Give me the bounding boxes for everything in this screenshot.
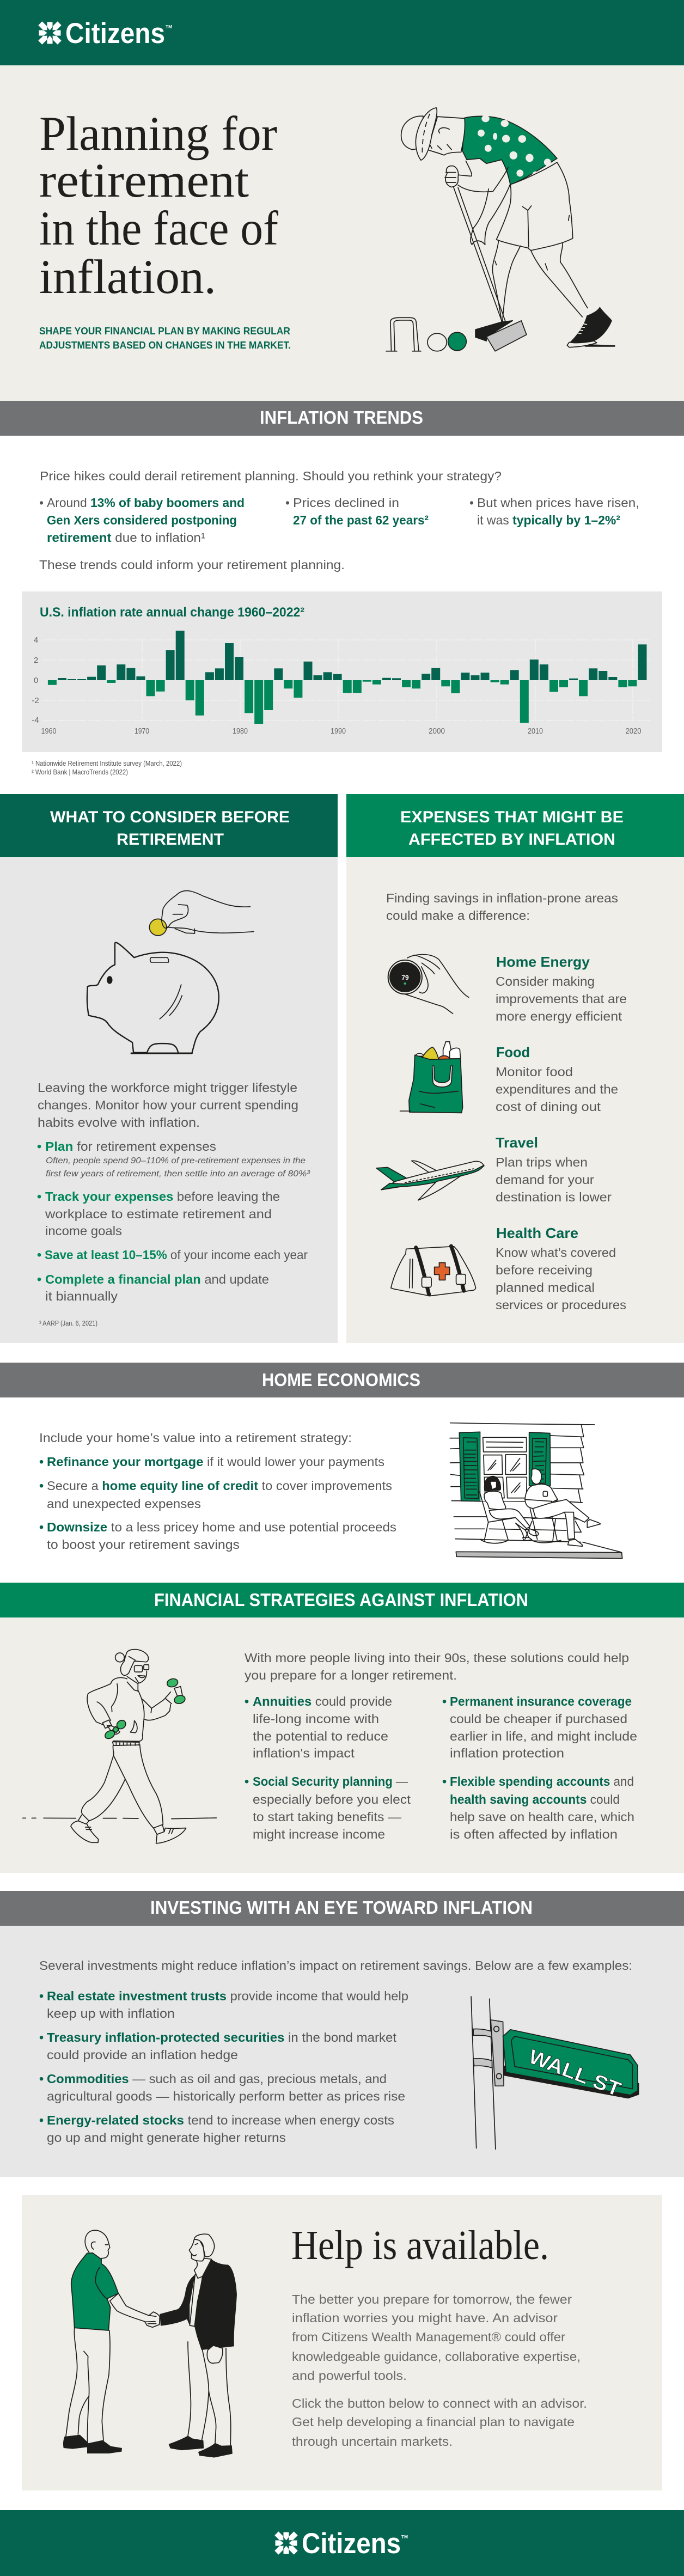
text block: travel (496, 1134, 612, 1204)
icon: grocery bag (400, 1042, 463, 1113)
stat: postponing retirement: Around 13% of baby boomers and (47, 496, 245, 510)
list: retirement actions: • (37, 1139, 41, 1153)
text block: home economics: Refinance your mortgage if it would lower your payments (47, 1455, 384, 1469)
text block: lifestyle changes (38, 1081, 298, 1130)
stat: prices declined (285, 496, 429, 527)
panel: inflation bar chart: 2000 (429, 727, 445, 736)
text block: permanent insurance: inflation protection (450, 1746, 564, 1760)
list: retirement actions: Track your expenses before leaving the (45, 1189, 280, 1204)
list: investment types: could provide an inflation hedge (47, 2048, 238, 2062)
text block: travel: Plan trips when (496, 1155, 588, 1169)
panel: inflation bar chart (22, 591, 662, 752)
list: investment types: agricultural goods — historically perform better as prices rise (47, 2089, 405, 2103)
footer band with logo: TM (401, 2535, 408, 2540)
subtitle: SHAPE YOUR FINANCIAL PLAN BY MAKING REGULAR (39, 326, 290, 337)
list: investment types: Energy-related stocks tend to increase when energy costs (47, 2113, 394, 2127)
list: retirement actions: • (37, 1272, 41, 1286)
text block: social security: might increase income (253, 1827, 385, 1841)
text block: lifestyle changes: changes. Monitor how your current spending (38, 1098, 298, 1112)
list: retirement actions: Often, people spend 90–110% of pre-retirement expenses in the (46, 1156, 306, 1165)
text block: annuities (245, 1694, 392, 1760)
stat: prices declined: Prices declined in (293, 496, 399, 510)
icon: piggy bank with coin (87, 891, 254, 1053)
intro text: inflation trends: These trends could inform your retirement planning. (39, 558, 345, 572)
panel: help is available (22, 2195, 662, 2490)
text block: annuities: inflation's impact (253, 1746, 355, 1760)
text block: food (496, 1044, 618, 1114)
panel: inflation bar chart: -4 (32, 716, 39, 725)
section band: investing (0, 1891, 684, 1926)
text block: home energy (496, 954, 627, 1023)
text block: health care: Health Care (496, 1225, 578, 1241)
icon: airplane (376, 1161, 484, 1200)
text block: permanent insurance: Permanent insurance coverage (450, 1694, 632, 1708)
stat: postponing retirement: • (39, 496, 44, 510)
text block: home economics (39, 1431, 396, 1552)
text block: advisor: knowledgeable guidance, collaborative expertise, (292, 2349, 581, 2364)
icon: Citizens logo mark (274, 2531, 298, 2555)
list: investment types: • (39, 2113, 44, 2127)
heading: AFFECTED BY INFLATION (408, 831, 615, 849)
text: street name: WALL ST (526, 2045, 624, 2101)
text block: home economics: Downsize to a less pricey home and use potential proceeds (47, 1520, 396, 1534)
intro text: inflation trends: Price hikes could derail retirement planning. Should you rethink your strategy? (40, 469, 502, 483)
list: investment types: Real estate investment trusts provide income that would help (47, 1989, 408, 2003)
section band: home economics: HOME ECONOMICS (262, 1370, 420, 1390)
text block: flexible spending: • (442, 1774, 447, 1788)
header band with logo: Citizens (65, 17, 165, 50)
text block: social security: especially before you elect (253, 1792, 411, 1806)
text block: home energy: Consider making (496, 974, 595, 988)
text block: permanent insurance: could be cheaper if purchased (450, 1712, 627, 1726)
list: retirement actions: income goals (45, 1224, 122, 1238)
text block: home economics: and unexpected expenses (47, 1497, 201, 1511)
panel: inflation bar chart: 0 (34, 676, 38, 685)
panel: expenses affected by inflation (346, 794, 684, 1343)
text block: advisor: from Citizens Wealth Management® could offer (292, 2330, 565, 2344)
section band: inflation trends: INFLATION TRENDS (260, 407, 423, 428)
icon: hand on thermostat (388, 955, 469, 1014)
text block: investing intro: Several investments might reduce inflation’s impact on retirement savings. Below are a few examples: (39, 1958, 632, 1973)
footnotes: sources (32, 759, 182, 776)
text block: health care: services or procedures (496, 1298, 626, 1312)
title: inflation. (39, 251, 216, 304)
text block: travel: Travel (496, 1134, 538, 1151)
list: retirement actions: Complete a financial plan and update (45, 1272, 269, 1286)
text block: home energy: more energy efficient (496, 1009, 622, 1023)
text block: savings intro: could make a difference: (386, 908, 530, 923)
text block: strategies intro: you prepare for a longer retirement. (245, 1668, 457, 1682)
text block: home energy: Home Energy (496, 954, 590, 970)
section band: inflation trends (0, 401, 684, 436)
list: investment types: go up and might generate higher returns (47, 2131, 286, 2145)
header band with logo (0, 0, 684, 65)
stat: postponing retirement (39, 496, 245, 545)
label: thermostat temperature: 79 (401, 974, 409, 981)
panel: inflation bar chart: 2 (34, 656, 38, 665)
text block: home economics: • (39, 1520, 44, 1534)
footer band with logo: Citizens (302, 2528, 401, 2560)
footnotes: sources: ¹ Nationwide Retirement Institute survey (March, 2022) (32, 759, 182, 767)
list: retirement actions: first few years of retirement, then settle into an average of 80%³ (46, 1169, 310, 1179)
text block: social security: Social Security planning — (253, 1774, 408, 1788)
heading: help is available: Help is available. (291, 2223, 549, 2268)
title (39, 107, 278, 304)
text block: health care: before receiving (496, 1263, 593, 1277)
list: investment types: • (39, 2030, 44, 2044)
panel: inflation bar chart: 2020 (625, 727, 642, 736)
stat: typical rises (469, 496, 639, 527)
list: retirement actions: Plan for retirement expenses (45, 1139, 216, 1153)
text block: home economics: Include your home’s value into a retirement strategy: (39, 1431, 352, 1445)
panel: inflation bar chart: 2010 (528, 727, 543, 736)
stat: postponing retirement: Gen Xers considered postponing (47, 513, 237, 527)
text block: advisor: and powerful tools. (292, 2369, 407, 2383)
text block: home economics: Secure a home equity line of credit to cover improvements (47, 1479, 392, 1493)
panel: investing (0, 1926, 684, 2177)
text block: flexible spending (442, 1774, 634, 1841)
text block: travel: demand for your (496, 1173, 594, 1187)
icon: Citizens logo mark (38, 21, 62, 45)
text block: flexible spending: Flexible spending accounts and (450, 1774, 634, 1788)
footer band with logo (0, 2510, 684, 2576)
text block: annuities: Annuities could provide (253, 1694, 392, 1708)
hero panel (0, 65, 684, 401)
stat: typical rises: it was typically by 1–2%² (477, 513, 620, 527)
text block: flexible spending: help save on health care, which (450, 1810, 634, 1824)
text block: advisor (292, 2292, 581, 2383)
text block: home economics: • (39, 1455, 44, 1469)
text block: lifestyle changes: Leaving the workforce might trigger lifestyle (38, 1081, 297, 1095)
text block: food: cost of dining out (496, 1100, 601, 1114)
text block: food: Monitor food (496, 1065, 573, 1079)
panel: inflation bar chart: 1970 (135, 727, 149, 736)
text block: permanent insurance: • (442, 1694, 447, 1708)
section band: financial strategies (0, 1583, 684, 1617)
text block: annuities: life-long income with (253, 1712, 379, 1726)
stat: typical rises: • (469, 496, 474, 510)
panel: inflation bar chart: 1960 (41, 727, 57, 736)
list: retirement actions: • (37, 1248, 41, 1262)
text block: permanent insurance (442, 1694, 637, 1760)
text block: health care: planned medical (496, 1280, 595, 1295)
text block: strategies intro (245, 1651, 629, 1682)
illustration: woman walking with dumbbells (23, 1650, 216, 1844)
panel: financial strategies (0, 1617, 684, 1873)
heading (50, 808, 290, 849)
text block: social security: to start taking benefits — (253, 1810, 401, 1824)
footnotes: sources: ² World Bank | MacroTrends (2022) (32, 768, 128, 776)
illustration: two people shaking hands (63, 2230, 237, 2457)
text block: food: expenditures and the (496, 1082, 618, 1096)
text block: annuities: • (245, 1694, 249, 1708)
text block: social security (245, 1774, 411, 1841)
text block: travel: destination is lower (496, 1190, 612, 1204)
list: investment types (39, 1989, 408, 2145)
text block: call to action: Get help developing a financial plan to navigate (292, 2415, 575, 2429)
section band: home economics (0, 1363, 684, 1397)
subtitle: ADJUSTMENTS BASED ON CHANGES IN THE MARKET. (39, 340, 291, 351)
title: retirement (39, 154, 249, 207)
text block: health care (496, 1225, 626, 1312)
subtitle (39, 326, 291, 351)
text block: strategies intro: With more people living into their 90s, these solutions could help (245, 1651, 629, 1665)
title: Planning for (39, 107, 277, 161)
text block: permanent insurance: earlier in life, and might include (450, 1729, 637, 1743)
list: retirement actions: Save at least 10–15% of your income each year (45, 1248, 308, 1262)
text block: savings intro (386, 891, 618, 923)
text block: social security: • (245, 1774, 249, 1788)
text block: call to action: Click the button below to connect with an advisor. (292, 2396, 587, 2410)
text block: health care: Know what’s covered (496, 1246, 616, 1260)
illustration: man playing croquet (386, 108, 615, 351)
text block: flexible spending: is often affected by inflation (450, 1827, 618, 1841)
list: investment types: • (39, 2072, 44, 2086)
icon: medical bag (391, 1246, 476, 1296)
heading: RETIREMENT (117, 831, 224, 849)
panel: inflation bar chart: 1980 (233, 727, 248, 736)
section band: financial strategies: FINANCIAL STRATEGIES AGAINST INFLATION (154, 1590, 528, 1610)
text block: advisor: The better you prepare for tomorrow, the fewer (292, 2292, 572, 2306)
list: retirement actions: • (37, 1189, 41, 1204)
text block: home energy: improvements that are (496, 992, 627, 1006)
text block: food: Food (496, 1044, 530, 1060)
list: investment types: Treasury inflation-protected securities in the bond market (47, 2030, 397, 2044)
panel: inflation bar chart: 4 (34, 636, 38, 645)
list: retirement actions (37, 1139, 310, 1303)
list: investment types: keep up with inflation (47, 2006, 175, 2020)
text block: home economics: to boost your retirement savings (47, 1537, 240, 1552)
text block: call to action: through uncertain markets. (292, 2434, 453, 2449)
stat: prices declined: 27 of the past 62 years² (293, 513, 429, 527)
list: investment types: Commodities — such as oil and gas, precious metals, and (47, 2072, 387, 2086)
text block: home economics: • (39, 1479, 44, 1493)
heading: EXPENSES THAT MIGHT BE (400, 808, 624, 826)
text block: advisor: inflation worries you might have. An advisor (292, 2311, 558, 2325)
text block: flexible spending: health saving accounts could (450, 1792, 620, 1806)
panel: inflation bar chart: 1990 (331, 727, 346, 736)
stat: postponing retirement: retirement due to inflation¹ (47, 530, 205, 545)
intro text: inflation trends (39, 469, 639, 572)
panel: what to consider before retirement (0, 794, 338, 1343)
list: investment types: • (39, 1989, 44, 2003)
text block: annuities: the potential to reduce (253, 1729, 388, 1743)
illustration: couple on the porch (450, 1423, 622, 1559)
stat: prices declined: • (285, 496, 290, 510)
list: retirement actions: workplace to estimate retirement and (45, 1207, 272, 1221)
section band: investing: INVESTING WITH AN EYE TOWARD INFLATION (150, 1897, 533, 1918)
panel: inflation bar chart: U.S. inflation rate annual change 1960–2022² (40, 605, 304, 620)
title: in the face of (39, 202, 278, 255)
list: retirement actions: it biannually (45, 1289, 118, 1303)
heading (400, 808, 624, 849)
stat: typical rises: But when prices have risen, (477, 496, 639, 510)
text block: lifestyle changes: habits evolve with inflation. (38, 1115, 200, 1130)
panel: inflation bar chart: -2 (32, 696, 39, 705)
footnote: AARP: ³ AARP (Jan. 6, 2021) (39, 1319, 97, 1327)
illustration: Wall St sign (471, 1997, 639, 2149)
text block: call to action (292, 2396, 587, 2449)
text block: savings intro: Finding savings in inflation-prone areas (386, 891, 618, 905)
header band with logo: TM (166, 25, 172, 29)
heading: WHAT TO CONSIDER BEFORE (50, 808, 290, 826)
